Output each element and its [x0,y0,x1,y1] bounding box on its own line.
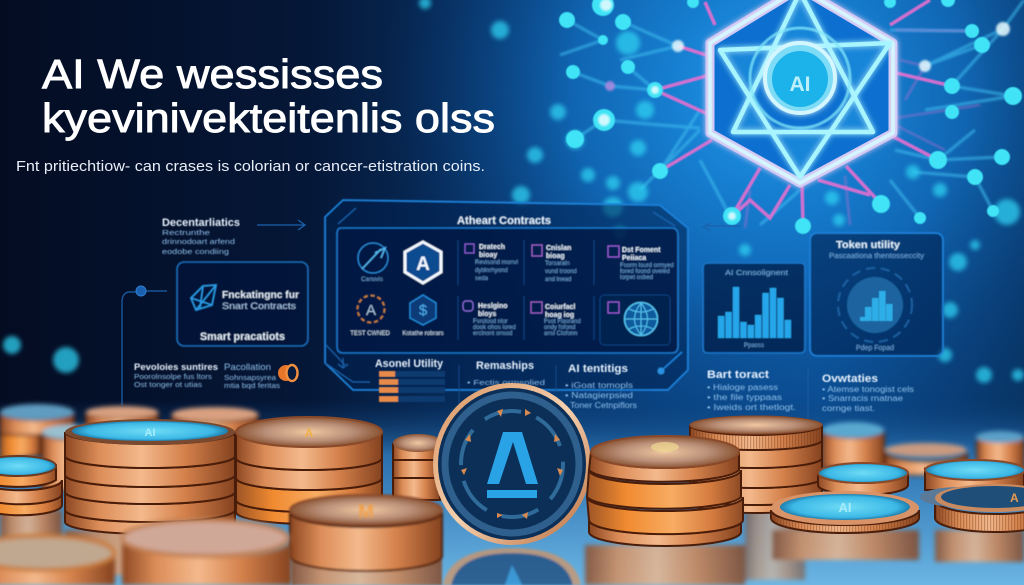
heading: Atheart Contracts [457,215,551,227]
arrow: back to panel [703,223,740,231]
connector: left node [122,286,167,405]
cell: item 2: vund troond [545,269,577,275]
icon: orange A ring: TEST CWNED [350,331,390,337]
cell: item 4: Heslgino [478,303,508,310]
cell: item 4: dook ohos lored [473,325,516,331]
icon: polygon network [191,285,216,310]
text block: decentralization note: Decentarliatics [162,217,240,229]
panel: AI consignment bar chart: Ppaoss [744,343,764,349]
cell: item 4: erclnont onsod [473,331,512,337]
cell: item 2: Cnislan [546,245,571,252]
coins: foreground out-of-focus [0,520,292,585]
text block: smart contract list: • Hialoge pasess [707,383,778,392]
text block: overlays list: • Atemse tonogist cels [822,385,914,394]
icon: pen circle: Canuvis [361,277,383,283]
panel: token utility: Pascaationa thentosseccity [829,253,925,260]
cell: item 2: bioag [546,253,565,260]
text block: provider notes: Poorolnsolpe fus ltors [134,374,213,381]
cell: item 2: and lnead [545,277,571,283]
coin: right front teal coin [771,491,919,533]
cell: item 3: Peiiaca [622,255,646,262]
text block: decentralization note: eodobe condiing [162,249,229,256]
text block: overlays list [822,373,914,413]
icon: pen circle [358,243,388,283]
coins: small stack behind centre [393,434,443,500]
cell: item 5: hoag iog [545,312,574,319]
icon: dollar hexagon: $ [419,302,428,319]
panel: smart practices: Fnckatingnc fur [222,289,299,301]
panel: smart contracts [325,200,688,390]
icon: A hexagon [405,242,441,283]
text block: provider notes: mtia bqd feritas [224,383,281,390]
text block: AI settings: AI tentitigs [568,363,628,375]
coins: front blurred stack: M [358,502,374,523]
text block: AI settings: Toner Cetnpiflors [570,401,637,410]
icon: A hexagon: A [416,254,430,275]
cell: item 1: seda [475,276,489,282]
text block: relationships [459,360,556,410]
coins: copper stack [236,417,382,524]
cell: item 5: Coiurfacl [545,304,575,311]
coins: right large stack [587,436,743,546]
coins: blurred background stacks [0,404,1024,490]
text block: relationships: Remaships [476,360,534,372]
coins: front blurred stack [290,495,442,585]
cell: item 1: Revisond rnonvl [475,260,518,266]
coin: right front teal coin: AI [838,500,852,515]
panel: token utility: Token utility [836,240,900,251]
text block: overlays list: • Snarracis rnatnae [822,394,904,403]
panel: token utility: Pdep Fopad [856,345,894,352]
cell: item 4 [463,301,516,337]
title: kyevinivekteitenlis olss [42,95,495,141]
text block: AI settings: • iGoat tomopls [565,381,633,390]
cell: item 2: Torsaraln [545,261,570,267]
text block: smart contract list: Bart toract [707,369,769,381]
text block: provider notes: Sohnsapsyrea [224,375,276,382]
coin mark: A [305,426,314,440]
coins: stack with teal top [65,419,235,534]
icon: dollar hexagon: Kotathe robrars [402,331,444,337]
text block: AI settings: • Natagierpsied [565,391,633,400]
coin: right dark-face coin: A [1010,491,1019,505]
text block: smart contract list [707,368,808,425]
cell: item 3: lorpet osbed [620,275,653,281]
cell: item 3: fored foond oveled [620,269,670,275]
coin: central AI token [433,383,591,545]
icon: orange A ring: A [366,302,376,319]
title: AI We wessisses [42,51,383,97]
cell: globe [600,295,670,345]
coin: right dark-face coin [920,484,1024,532]
text block: decentralization note [162,217,240,256]
cell: item 5: ansl Clofonn [544,331,577,337]
cell: item 2 [532,245,577,283]
panel: token utility [810,233,943,356]
cell: item 1 [465,244,518,282]
panel: AI consignment bar chart: AI Cnnsolignent [725,270,788,277]
icon: orange token [278,365,298,381]
text block: decentralization note: Rectrunthe [162,230,210,237]
text block: relationships: • Fectis ormsolied [467,380,545,387]
panel: smart practices: Smart pracatiots [200,331,285,343]
cell: item 5: ondy fofond [544,325,575,331]
cell: item 1: bioay [479,252,497,259]
coins: reflections on floor [0,510,1024,585]
subtitle: Fnt pritiechtiow- can crases is colorian or cancer-etistration coins. [16,158,485,175]
title [42,51,495,141]
cell: item 3: Fsorm lourd ormyed [620,263,674,269]
cell: item 5 [531,302,581,337]
cell: item 5: Fsot Flasrand [544,319,581,325]
panel: asset utility bars: Asonel Utility [375,358,444,370]
icon: orange A ring [350,296,390,337]
text block: decentralization note: drinnodoart arfend [162,239,235,246]
coin: central token reflection [443,548,581,585]
cell: item 3 [608,246,674,281]
cell: item 4: Fsrolosd nlor [473,319,508,325]
text block: overlays list: Ovwtaties [822,373,878,385]
text block: smart contract list: • the file typpaas [707,393,782,402]
icon: dollar hexagon [402,295,444,337]
icon: AI hexagon emblem [710,0,893,183]
panel: asset utility bars [375,358,445,402]
text block: AI settings [565,363,637,410]
panel: smart practices [177,262,308,346]
coins: right ribbed teal coin back [818,460,1024,495]
text block: provider notes [134,362,281,390]
text block: provider notes: Pevoloies suntires [134,362,218,373]
panel: AI consignment bar chart [703,263,805,353]
text block: provider notes: Pacollation [224,362,271,373]
cell: item 3: Dst Foment [622,247,661,254]
cell: item 1: dyblnrhyond [475,268,508,274]
cell: item 4: bloys [478,311,496,318]
panel: smart practices: Snart Contracts [222,301,296,312]
text block: overlays list: cornge tiast. [822,404,875,413]
arrow: to main panel [257,220,305,230]
coins: right ribbed stack [690,416,822,513]
text block: smart contract list: • Iweids ort thetlogt. [707,403,796,412]
text block: provider notes: Ost tonger ot utias [134,382,203,389]
cell: item 1: Dratech [479,244,505,251]
coin mark: AI [144,427,156,439]
coins: left small stack [0,456,62,515]
network of glowing nodes [3,0,1024,383]
icon label: AI: AI [790,73,810,96]
